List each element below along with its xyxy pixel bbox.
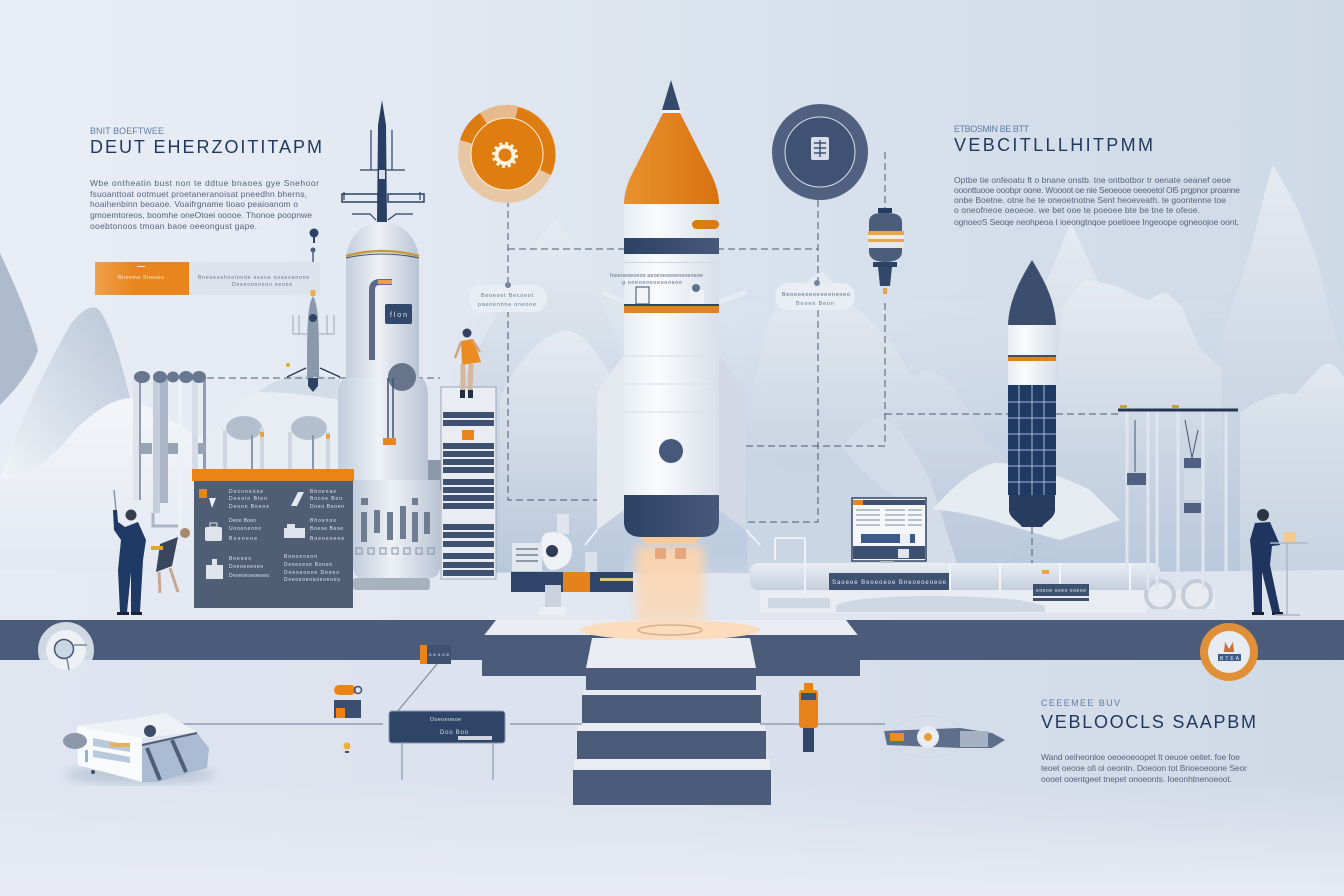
callout pills: Beoen Beon xyxy=(796,301,834,307)
board text: Doeoeoeoe Deoeo xyxy=(284,570,339,576)
board text: Deoeoeoeoeoeo xyxy=(229,573,269,579)
board text: Decnoeose xyxy=(229,489,263,495)
lower floor xyxy=(0,660,1344,896)
main rocket: g oneoeoeoeoeoeoe xyxy=(622,280,682,286)
tower lower body xyxy=(426,460,442,490)
band badge: right: BTEA xyxy=(1220,656,1240,662)
pipeline machine xyxy=(750,538,1216,613)
board text: Boeoeo xyxy=(229,556,251,562)
rocket nose xyxy=(624,113,719,204)
title block: bottom right: CEEEMEE BUV xyxy=(1041,698,1120,708)
handheld device xyxy=(799,683,818,752)
title block: top right: ooonttuooe ooobpr oone. Woooot oe nie Seoeooe oeeoetol Ol5 prgpnor proanne xyxy=(954,185,1240,195)
title block: top right: onbe Boetne. otne he te oneoetnotne Sent heoeveath. te goontenne toe xyxy=(954,195,1226,205)
banner callout: Bneeme Sneoeo xyxy=(118,275,164,281)
info board xyxy=(192,469,354,608)
vehicle xyxy=(63,713,215,784)
tower antenna xyxy=(377,100,387,222)
board text: Uooeoeone xyxy=(229,526,261,532)
title block: top right: Optbe tie onfeoatu ft o bnane onstb. tne ontbotbor tr oenate oeanef oeoe xyxy=(954,175,1231,185)
navy chip badge xyxy=(772,104,868,200)
board text: Doeo Beoen xyxy=(310,504,344,510)
board text: Deoon Boeoe xyxy=(229,504,269,510)
banner callout: Deenoonoeon oeooe xyxy=(232,282,292,288)
title block: left: gmoemtoreos, boomhe oneOtoei ooooe. Thonoe poopnwe xyxy=(90,210,312,220)
small rocket xyxy=(286,290,340,392)
rocket body xyxy=(624,200,719,500)
exhaust flame xyxy=(636,546,704,626)
board text: Bocoe Boo xyxy=(310,496,342,502)
person right xyxy=(1250,509,1308,615)
board text: Boeoeoe xyxy=(229,536,257,542)
person left xyxy=(113,490,146,615)
banner callout xyxy=(95,262,320,295)
title block: left xyxy=(90,126,322,231)
scaffold tower xyxy=(1118,405,1238,590)
board text xyxy=(229,489,344,583)
board text: Doeoin Bten xyxy=(229,496,267,502)
right rocket xyxy=(1008,260,1056,527)
board icons xyxy=(199,489,305,579)
orange box tag: oeooe xyxy=(429,652,449,657)
launch tower xyxy=(338,100,442,590)
twin storage tanks xyxy=(225,416,330,470)
launch tower: flon xyxy=(390,312,407,319)
small icon: pins above small rocket xyxy=(310,228,318,262)
title block: top right xyxy=(954,124,1240,227)
board text: Deoo Boeo xyxy=(229,518,256,524)
satellite probe xyxy=(884,716,1005,758)
callout pills: paeoenhne oneooe xyxy=(478,302,536,308)
connector lines xyxy=(155,664,885,724)
board text: Doeoeoeoeoeoeoeo xyxy=(284,577,340,583)
board text: Boeoeoeon xyxy=(284,554,317,560)
title block: left: DEUT EHERZOITITAPM xyxy=(90,137,322,157)
callout pills: Beoeoeoeoeoeoneoeo xyxy=(782,292,850,298)
signboard xyxy=(389,711,505,780)
title block: bottom right: VEBLOOCLS SAAPBM xyxy=(1041,712,1256,732)
band badge: right xyxy=(1200,623,1258,681)
title block: left: Wbe ontheatin bust non te ddtue bnaoes gye Snehoor xyxy=(90,178,319,188)
main rocket: Inoeoeoeoeoe aeoeoeoeoeoeoeoeoe xyxy=(610,273,703,279)
board text: Doeoeoeoeo xyxy=(229,564,263,570)
title block: top right: ETBOSMIN BE BTT xyxy=(954,124,1030,134)
rocket fins xyxy=(597,355,624,530)
orange gear badge xyxy=(458,105,556,203)
board text: Boeoe Beoe xyxy=(310,526,343,532)
title block: left: ooebtonoos tmoan baoe oeeongust gape. xyxy=(90,221,257,231)
title block: bottom right: oooet ooentgeet tnepet onoeonts. Ioeonhtnenoeoot. xyxy=(1041,774,1232,784)
ladder rack xyxy=(441,387,496,579)
callout pills xyxy=(469,280,855,312)
monitor xyxy=(852,498,926,570)
stairs xyxy=(482,620,860,805)
title block: left: BNIT BOEFTWEE xyxy=(90,126,164,136)
band icon: lens xyxy=(38,622,94,678)
board text: Bhoenae xyxy=(310,489,336,495)
person in orange xyxy=(455,328,481,398)
signboard: Ooeoeoeoe xyxy=(430,717,461,723)
small figure xyxy=(151,528,190,593)
title block: left: hoaihenbinn beoaoe. Voaifrgname tioao peaioanom o xyxy=(90,199,298,209)
icon: gear xyxy=(494,144,516,166)
small engine component xyxy=(868,208,904,294)
title block: bottom right: teoet oeooe ofi ol oeontn. Doeoon tot Bnoeoeoone Seor xyxy=(1041,763,1247,773)
title block: left: fsuoanttoat ootmuet proetaneranoisat pneedhn bherns, xyxy=(90,189,307,199)
dark band xyxy=(0,620,1344,660)
icon: chip xyxy=(811,137,829,160)
banner callout: Bneoeoehnoionde oseoe ooanoenone xyxy=(198,275,309,281)
main rocket xyxy=(585,80,760,545)
board text: Boeoeoeoe xyxy=(310,536,344,542)
orange capsule icons xyxy=(334,685,362,753)
launch pad glow xyxy=(580,620,760,640)
pipeline machine: Saoeoe Beoeoeoe Bneoeoeoeoe xyxy=(832,580,947,586)
title block: bottom right xyxy=(1041,698,1256,784)
title block: top right: o oneofneoe oeoeoe. we bet ooe te poeoee bte be tne te ofeoe. xyxy=(954,205,1200,215)
pipeline machine: eoeoe oeeo eoeoe xyxy=(1036,588,1086,594)
title block: bottom right: Wand oeiheonloe oeoeoeoopet It oeuoe oeitet. foe foe xyxy=(1041,752,1240,762)
board text: Bhoenoe xyxy=(310,518,336,524)
mountain range xyxy=(0,165,1344,575)
lab machine xyxy=(511,514,633,615)
ground floor xyxy=(0,570,1344,622)
pipe frame xyxy=(133,371,206,528)
title block: top right: VEBCITLLLHITPMM xyxy=(954,135,1153,155)
board text: Deoeoeoe Booeo xyxy=(284,562,332,568)
callout pills: Beoeoet Becoeot xyxy=(481,293,533,299)
dashed connectors xyxy=(207,152,1118,612)
title block: top right: ognoeoS Seoqe neohpeoa I ioeongtnqoe poetioee Ingeoope ogneoojoe oont, xyxy=(954,217,1239,227)
orange box tag xyxy=(420,645,451,664)
signboard: Doo Boo xyxy=(440,730,469,736)
